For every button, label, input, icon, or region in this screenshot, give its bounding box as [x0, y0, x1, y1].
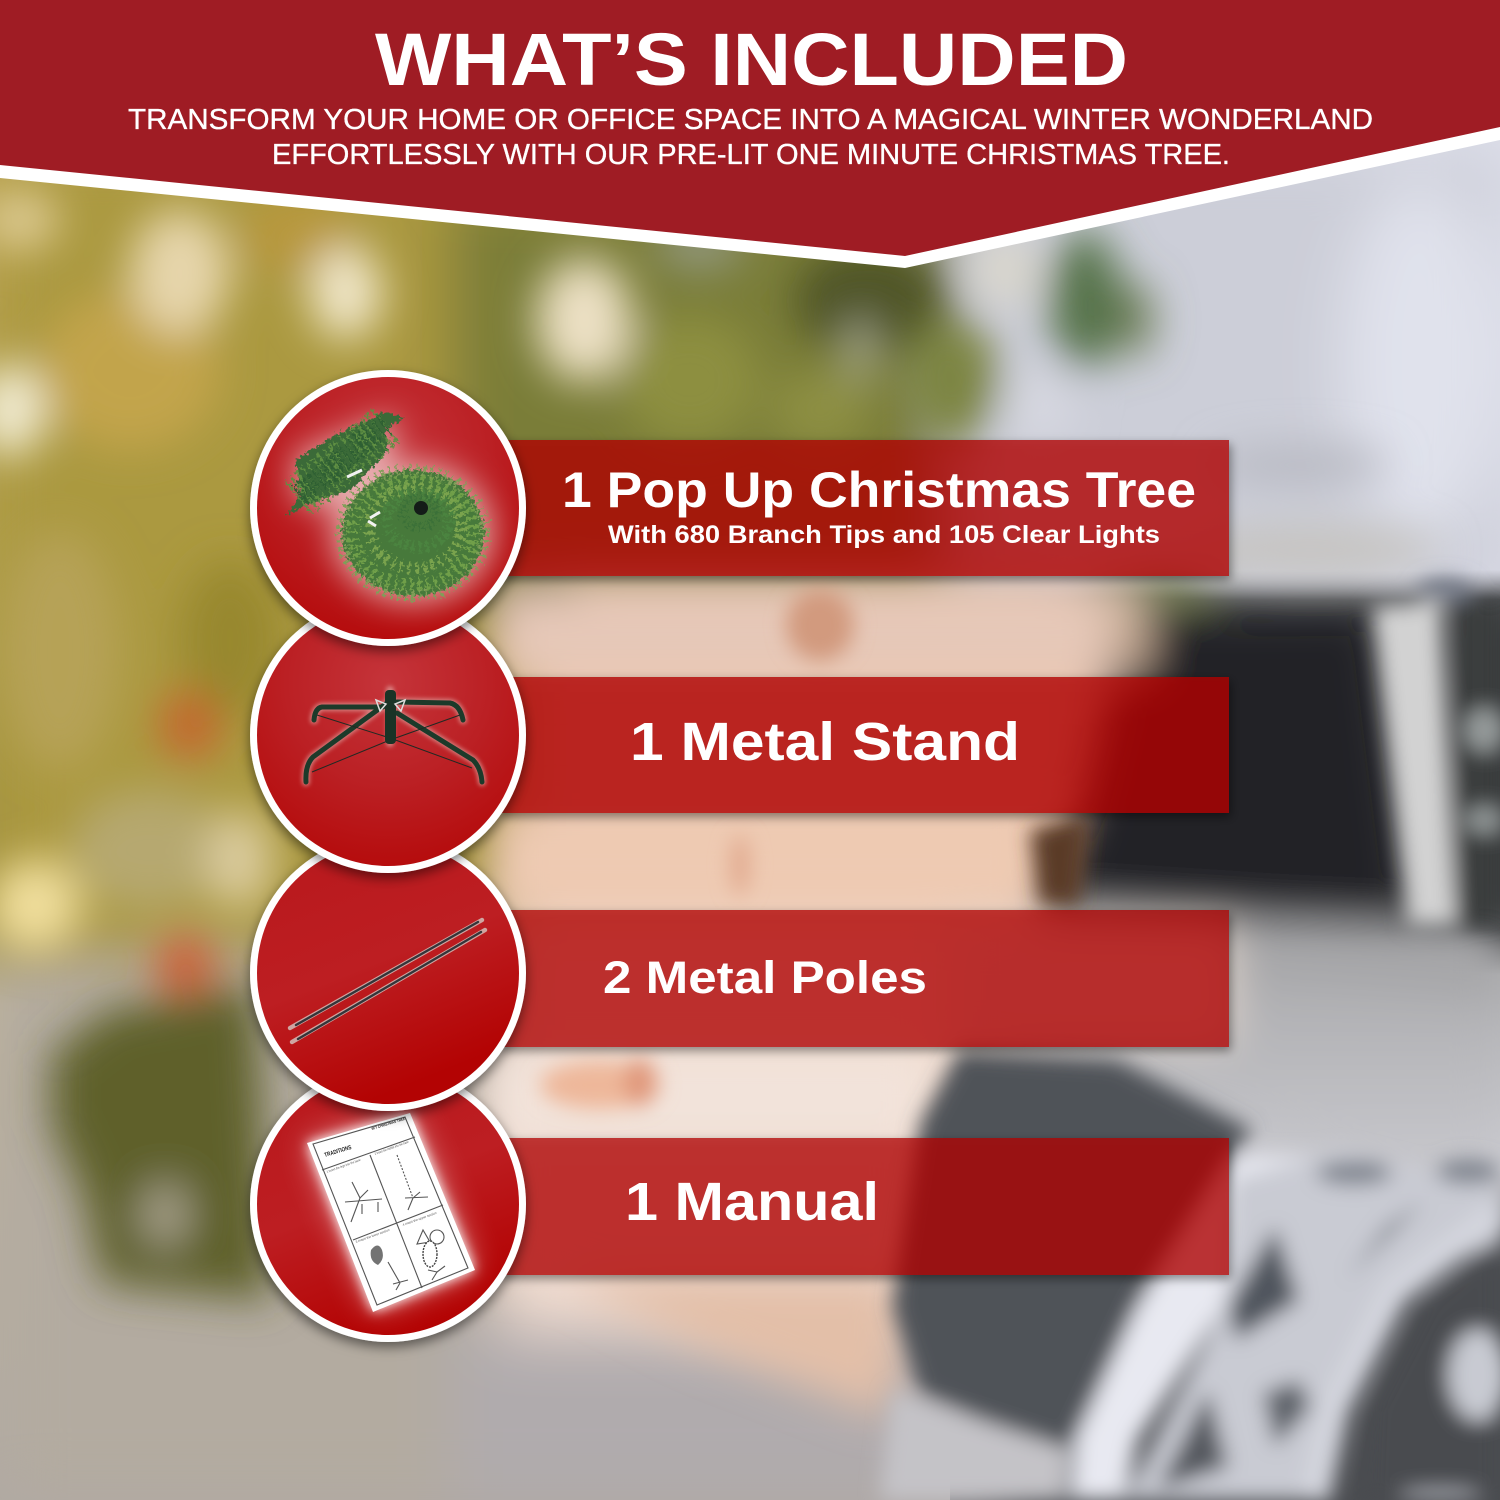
circle: metal poles	[250, 835, 526, 1111]
icon: stand	[306, 690, 482, 782]
subtitle: EFFORTLESSLY WITH OUR PRE-LIT ONE MINUTE CHRISTMAS TREE.	[272, 139, 1230, 171]
item bar: 1 Manual	[500, 1138, 1229, 1275]
banner red shape	[0, 0, 1500, 256]
circle: manual	[250, 1066, 526, 1342]
item bar: 1 Metal Stand	[500, 677, 1229, 813]
icon: folded tree	[287, 412, 493, 603]
title: WHAT’S INCLUDED	[375, 18, 1128, 101]
dark sweater	[892, 1050, 1252, 1457]
item bar: 1 Manual: 1 Manual	[625, 1172, 879, 1232]
item bar: 1 Pop Up Christmas Tree: With 680 Branch Tips and 105 Clear Lights	[608, 521, 1160, 549]
banner white edge	[0, 122, 1500, 268]
icon: two poles	[290, 920, 485, 1042]
icon: manual sheet: 6FT CHRISTMAS TREE	[371, 1117, 406, 1131]
subtitle	[128, 104, 1373, 171]
icon: manual sheet: 2 Insert the middle into the base	[374, 1140, 409, 1156]
circle: metal stand	[250, 597, 526, 873]
item bar: 1 Pop Up Christmas Tree: 1 Pop Up Christmas Tree	[562, 462, 1196, 518]
icon: manual sheet: 1 Insert the legs into the base	[326, 1158, 361, 1174]
item bar: 2 Metal Poles	[500, 910, 1229, 1047]
icon: manual sheet: 3 Insert the lower section	[355, 1228, 390, 1244]
icon: manual sheet: TRADITIONS	[324, 1145, 352, 1159]
header banner	[0, 0, 1500, 268]
icon: manual sheet	[307, 1113, 475, 1312]
circle: tree	[250, 370, 526, 646]
item bar: 1 Pop Up Christmas Tree	[500, 440, 1229, 576]
item bar: 1 Metal Stand: 1 Metal Stand	[630, 712, 1020, 772]
subtitle: TRANSFORM YOUR HOME OR OFFICE SPACE INTO A MAGICAL WINTER WONDERLAND	[128, 104, 1373, 136]
item bar: 2 Metal Poles: 2 Metal Poles	[603, 952, 927, 1003]
icon: manual sheet: 4 Insert the upper section	[402, 1211, 437, 1227]
